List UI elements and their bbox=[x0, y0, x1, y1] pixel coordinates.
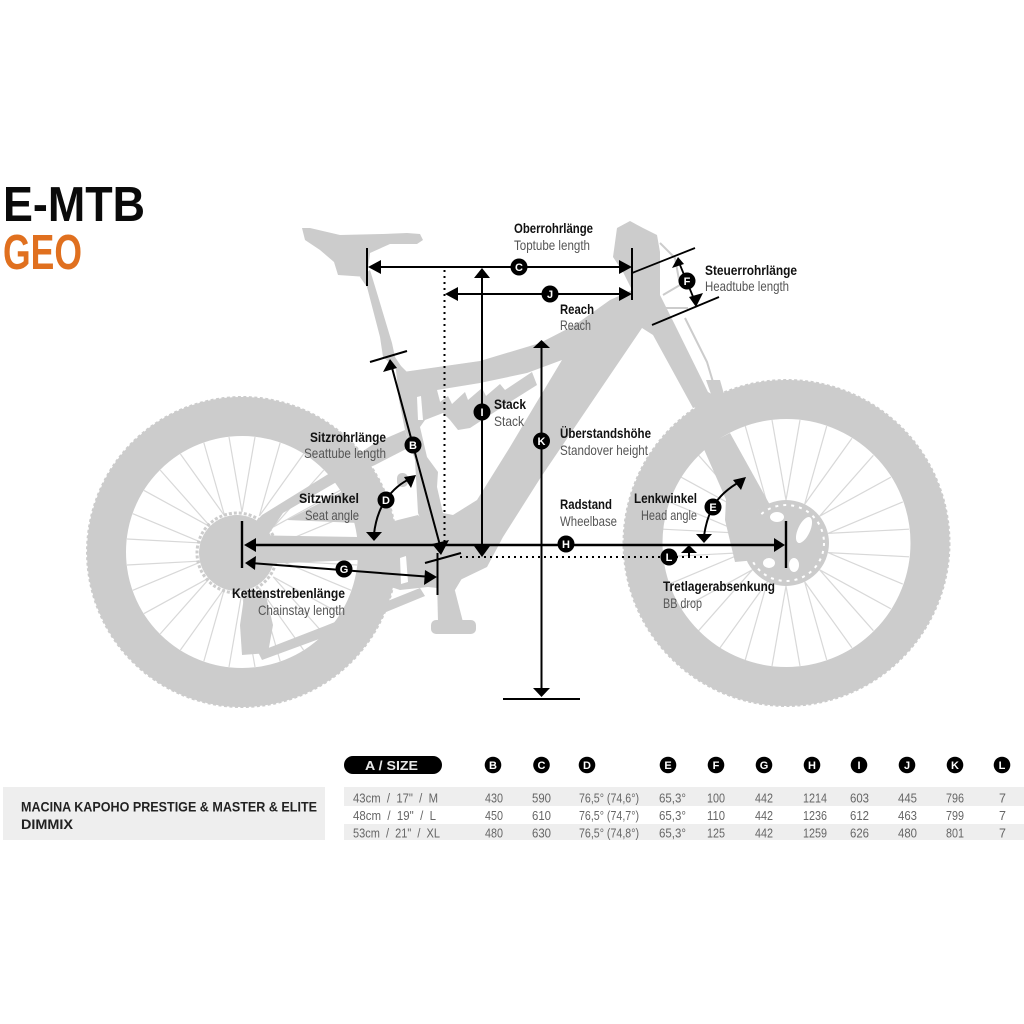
labels: Stack bbox=[494, 413, 525, 429]
rear wheel bbox=[87, 397, 397, 707]
row 43cm: 76,5° (74,6°) bbox=[579, 792, 639, 806]
column headers: G bbox=[760, 760, 768, 772]
column headers: I bbox=[857, 760, 861, 772]
saddle bbox=[302, 228, 423, 277]
shock bbox=[440, 372, 537, 430]
row 43cm: 65,3° bbox=[659, 792, 686, 806]
labels: BB drop bbox=[663, 595, 702, 611]
row 48cm: 463 bbox=[898, 809, 917, 823]
row 53cm: 630 bbox=[532, 826, 551, 840]
seatstay bbox=[240, 430, 410, 562]
title: E-MTB bbox=[3, 178, 145, 232]
dimension markers: F bbox=[684, 276, 691, 288]
column headers: D bbox=[583, 760, 591, 772]
labels: Steuerrohrlänge bbox=[705, 262, 797, 278]
dimension markers: K bbox=[538, 436, 546, 448]
dimension markers: C bbox=[515, 262, 523, 274]
row 48cm: 799 bbox=[946, 809, 964, 823]
title: GEO bbox=[3, 226, 82, 280]
row 43cm: 442 bbox=[755, 792, 773, 806]
dimension markers: I bbox=[480, 407, 484, 419]
row 43cm: 796 bbox=[946, 792, 964, 806]
row 53cm: 53cm / 21" / XL bbox=[353, 826, 440, 840]
E head angle arc bbox=[704, 481, 741, 536]
H wheelbase dimension bbox=[242, 521, 786, 568]
row 53cm bbox=[353, 826, 1006, 840]
column headers: L bbox=[999, 760, 1006, 772]
row 53cm: 125 bbox=[707, 826, 725, 840]
row 48cm: 1236 bbox=[803, 809, 827, 823]
front wheel bbox=[624, 380, 950, 706]
column headers: F bbox=[713, 760, 720, 772]
row 53cm: 7 bbox=[999, 826, 1006, 840]
F headtube dimension bbox=[632, 248, 719, 325]
dimension markers: B bbox=[409, 440, 417, 452]
row 53cm: 480 bbox=[898, 826, 917, 840]
row 43cm: 1214 bbox=[803, 792, 827, 806]
labels: Toptube length bbox=[514, 237, 590, 253]
cables bbox=[660, 243, 713, 382]
labels: Sitzwinkel bbox=[299, 490, 359, 506]
labels: Reach bbox=[560, 317, 591, 333]
row 43cm bbox=[353, 792, 1006, 806]
labels: Sitzrohrlänge bbox=[310, 429, 386, 445]
labels: Oberrohrlänge bbox=[514, 220, 593, 236]
row 43cm: 590 bbox=[532, 792, 551, 806]
labels: Chainstay length bbox=[258, 602, 345, 618]
row 53cm: 801 bbox=[946, 826, 964, 840]
labels: Seattube length bbox=[304, 445, 386, 461]
chain bbox=[258, 588, 425, 660]
model name panel bbox=[3, 787, 325, 840]
dimension markers: J bbox=[547, 289, 553, 301]
labels bbox=[232, 220, 797, 618]
title bbox=[3, 178, 145, 280]
frame bbox=[240, 221, 770, 660]
row 53cm: 626 bbox=[850, 826, 869, 840]
labels: Lenkwinkel bbox=[634, 490, 697, 506]
derailleur bbox=[240, 590, 273, 655]
column headers: H bbox=[808, 760, 816, 772]
column headers: K bbox=[951, 760, 959, 772]
labels: Standover height bbox=[560, 442, 648, 458]
row 48cm: 48cm / 19" / L bbox=[353, 809, 436, 823]
row 53cm: 480 bbox=[485, 826, 503, 840]
row 43cm: 7 bbox=[999, 792, 1006, 806]
row 48cm: 610 bbox=[532, 809, 551, 823]
labels: Tretlagerabsenkung bbox=[663, 578, 775, 594]
row 48cm: 450 bbox=[485, 809, 503, 823]
bike silhouette bbox=[87, 221, 950, 707]
column headers bbox=[485, 757, 1010, 773]
row 53cm: 76,5° (74,8°) bbox=[579, 826, 639, 840]
dotted reference lines bbox=[444, 270, 708, 557]
row 48cm: 76,5° (74,7°) bbox=[579, 809, 639, 823]
top tube, head tube and downtube bbox=[403, 221, 722, 587]
row 53cm: 65,3° bbox=[659, 826, 686, 840]
model name panel: DIMMIX bbox=[21, 816, 74, 832]
L bb drop mark bbox=[688, 552, 690, 557]
row 43cm: 445 bbox=[898, 792, 917, 806]
K standover dimension bbox=[503, 345, 580, 699]
B seattube dimension bbox=[370, 351, 461, 563]
dimension lines bbox=[242, 248, 786, 699]
labels: Reach bbox=[560, 301, 594, 317]
column headers: C bbox=[538, 760, 546, 772]
G chainstay dimension bbox=[250, 553, 438, 595]
pedal bbox=[431, 620, 476, 634]
row 48cm: 65,3° bbox=[659, 809, 686, 823]
labels: Radstand bbox=[560, 496, 612, 512]
labels: Kettenstrebenlänge bbox=[232, 585, 345, 601]
geometry table bbox=[3, 756, 1024, 840]
row 48cm: 7 bbox=[999, 809, 1006, 823]
I stack dimension bbox=[481, 272, 483, 552]
model name panel: MACINA KAPOHO PRESTIGE & MASTER & ELITE bbox=[21, 798, 317, 814]
row 43cm: 430 bbox=[485, 792, 503, 806]
dimension markers: E bbox=[709, 502, 717, 514]
frame white details bbox=[400, 396, 423, 584]
seatpost bbox=[360, 270, 407, 385]
linkage bbox=[397, 473, 408, 487]
crank bbox=[437, 580, 463, 622]
size header pill: A / SIZE bbox=[365, 758, 418, 773]
row 48cm: 612 bbox=[850, 809, 869, 823]
labels: Head angle bbox=[641, 507, 697, 523]
row 48cm bbox=[353, 809, 1006, 823]
labels: Headtube length bbox=[705, 278, 789, 294]
row 43cm: 100 bbox=[707, 792, 725, 806]
fork bbox=[706, 380, 724, 397]
labels: Wheelbase bbox=[560, 513, 617, 529]
row 48cm: 442 bbox=[755, 809, 773, 823]
column headers: J bbox=[904, 760, 910, 772]
J reach dimension bbox=[450, 293, 628, 295]
size header pill bbox=[344, 756, 442, 774]
row stripes bbox=[344, 787, 1024, 840]
labels: Überstandshöhe bbox=[560, 425, 651, 441]
row 48cm: 110 bbox=[707, 809, 725, 823]
chainstay and motor bbox=[240, 515, 470, 590]
dimension markers: D bbox=[382, 495, 390, 507]
row 43cm: 603 bbox=[850, 792, 869, 806]
column headers: B bbox=[489, 760, 497, 772]
seat tube bbox=[395, 360, 455, 545]
dimension markers bbox=[336, 258, 722, 578]
row 53cm: 1259 bbox=[803, 826, 827, 840]
dimension markers: G bbox=[340, 564, 348, 576]
dimension markers: H bbox=[562, 539, 570, 551]
row 43cm: 43cm / 17" / M bbox=[353, 792, 438, 806]
labels: Seat angle bbox=[305, 507, 359, 523]
D seat angle arc bbox=[374, 478, 412, 534]
arrowheads bbox=[244, 257, 785, 697]
row 53cm: 442 bbox=[755, 826, 773, 840]
column headers: E bbox=[664, 760, 672, 772]
C toptube dimension bbox=[367, 248, 632, 300]
dimension markers: L bbox=[666, 552, 673, 564]
labels: Stack bbox=[494, 396, 526, 412]
